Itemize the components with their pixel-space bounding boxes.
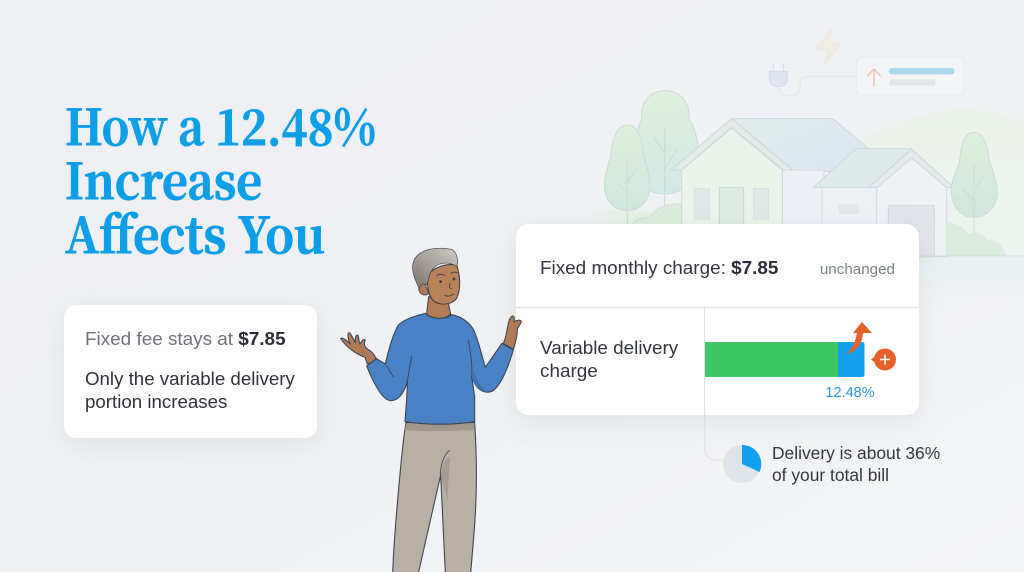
face details — [437, 272, 457, 296]
variable portion text: portion increases — [85, 391, 227, 412]
icon: plus badge — [871, 348, 896, 370]
back tree — [636, 91, 698, 230]
panel: fixed fee note — [64, 305, 317, 438]
right tree — [951, 132, 997, 233]
right hand — [503, 316, 521, 349]
gabled house front — [682, 128, 782, 257]
fixed monthly charge text: Fixed monthly charge: $7.85 — [540, 258, 778, 279]
rear wall — [782, 170, 824, 257]
icon: orange up arrow — [846, 322, 872, 354]
delivery share text: of your total bill — [772, 465, 889, 485]
cord — [778, 76, 856, 96]
bar chart — [705, 342, 875, 401]
icon: lightning bolt — [815, 30, 841, 65]
illustration: house scene with trees — [580, 91, 1024, 300]
bar label: 12.48% — [825, 385, 875, 401]
right wing — [822, 187, 877, 257]
connector line to pie — [705, 415, 724, 460]
bush left — [633, 204, 682, 230]
panel: delivery charge card — [516, 224, 919, 415]
variable delivery label: Variable delivery — [540, 338, 678, 359]
ground band — [600, 256, 1024, 300]
delivery share text: Delivery is about 36% — [772, 443, 940, 463]
fixed fee text: Fixed fee stays at $7.85 — [85, 329, 286, 350]
unchanged label: unchanged — [820, 261, 895, 278]
title: Increase — [65, 144, 262, 214]
icon: plug — [769, 63, 787, 87]
main roof — [732, 119, 868, 172]
hill — [860, 109, 1024, 263]
ground line — [917, 254, 1024, 257]
neck — [427, 297, 451, 318]
variable delivery label: charge — [540, 361, 598, 382]
head — [428, 265, 460, 304]
left hand — [341, 333, 377, 364]
variable portion text: Only the variable delivery — [85, 368, 295, 389]
illustration: person shrugging — [341, 248, 521, 572]
title — [65, 90, 376, 268]
left tree — [604, 125, 650, 230]
divider lines — [516, 308, 919, 415]
left ground — [580, 209, 680, 257]
trousers — [393, 423, 476, 572]
hair — [413, 248, 458, 289]
title: Affects You — [65, 198, 325, 268]
sweater — [367, 313, 513, 424]
mini card — [856, 58, 964, 95]
illustration: plug, lightning bolt and meter card — [769, 30, 964, 96]
icon: up arrow — [867, 69, 881, 87]
pie chart — [723, 445, 761, 483]
right bush — [945, 221, 1006, 256]
ear — [419, 284, 429, 295]
title: How a 12.48% — [65, 90, 376, 160]
